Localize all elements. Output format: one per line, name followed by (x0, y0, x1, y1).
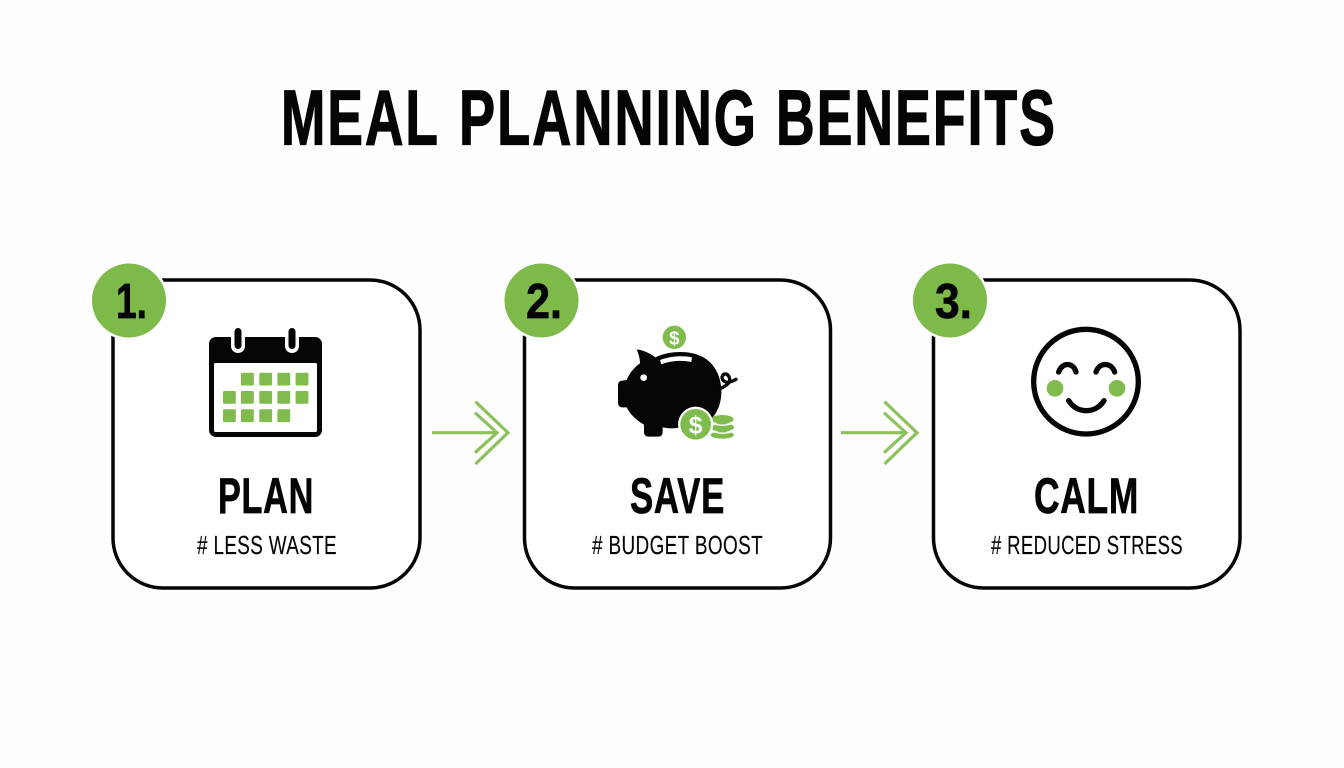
panel: calm (910, 261, 1240, 588)
icon: piggy bank (618, 326, 736, 442)
arrow: plan to save (432, 402, 508, 464)
heading: save: SAVE (630, 468, 725, 524)
badge: step 3: 3. (935, 275, 972, 329)
icon: pig body (618, 349, 721, 437)
badge: step 1 (90, 261, 168, 340)
icon: coins: $ (689, 412, 703, 439)
badge: step 2 (502, 261, 581, 340)
title: PLANNING (459, 74, 758, 162)
icon: smiling face (1034, 329, 1138, 434)
icon: falling coin: $ (669, 327, 680, 348)
badge: step 2: 2. (526, 275, 562, 329)
arrow: save to calm (841, 402, 917, 464)
badge: step 3 (910, 261, 990, 340)
badge: step 1: 1. (116, 275, 147, 329)
heading: calm: CALM (1034, 468, 1139, 524)
text: budget boost: # BUDGET BOOST (592, 530, 763, 560)
title (281, 74, 1057, 162)
title: MEAL (281, 74, 440, 162)
text: reduced stress: # REDUCED STRESS (991, 530, 1183, 560)
panel: save (502, 261, 830, 588)
text: less waste: # LESS WASTE (197, 530, 337, 560)
panel: plan (90, 261, 420, 588)
icon: calendar (209, 324, 322, 437)
heading: plan: PLAN (218, 468, 314, 524)
title: BENEFITS (776, 74, 1057, 162)
